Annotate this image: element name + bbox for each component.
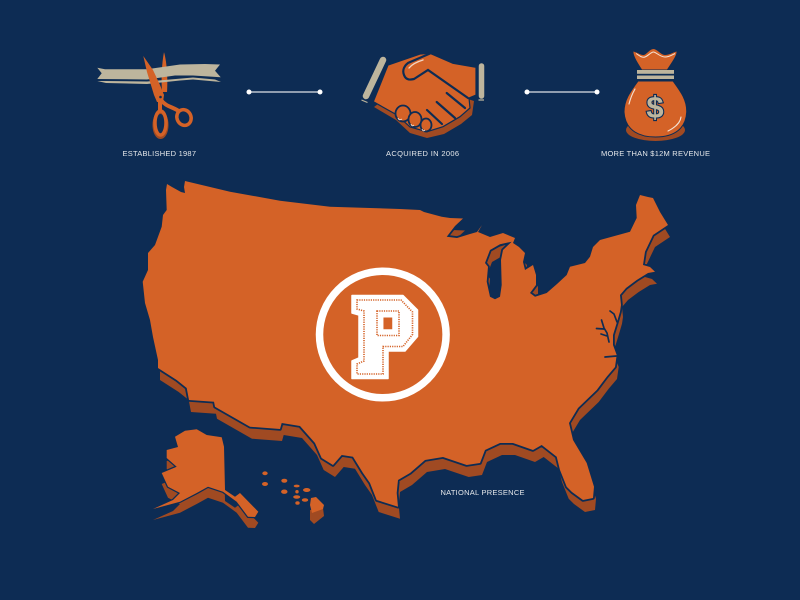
map: Alaska: [153, 429, 258, 528]
label: established: ESTABLISHED 1987: [122, 149, 196, 158]
map: contiguous United States with drop shadow: [143, 181, 670, 519]
connector line one: [246, 90, 322, 94]
icon: handshake: [362, 53, 484, 138]
logo: circled varsity P: [320, 271, 446, 398]
label: acquired: ACQUIRED IN 2006: [386, 149, 459, 158]
connector line two: [524, 90, 600, 94]
label: national presence: NATIONAL PRESENCE: [440, 488, 524, 497]
map: Hawaii: [262, 471, 324, 524]
dollar sign: $: [646, 90, 664, 124]
icon: scissors cutting ribbon: [97, 52, 221, 137]
icon: money bag: [624, 49, 687, 141]
label: revenue: MORE THAN $12M REVENUE: [601, 149, 710, 158]
